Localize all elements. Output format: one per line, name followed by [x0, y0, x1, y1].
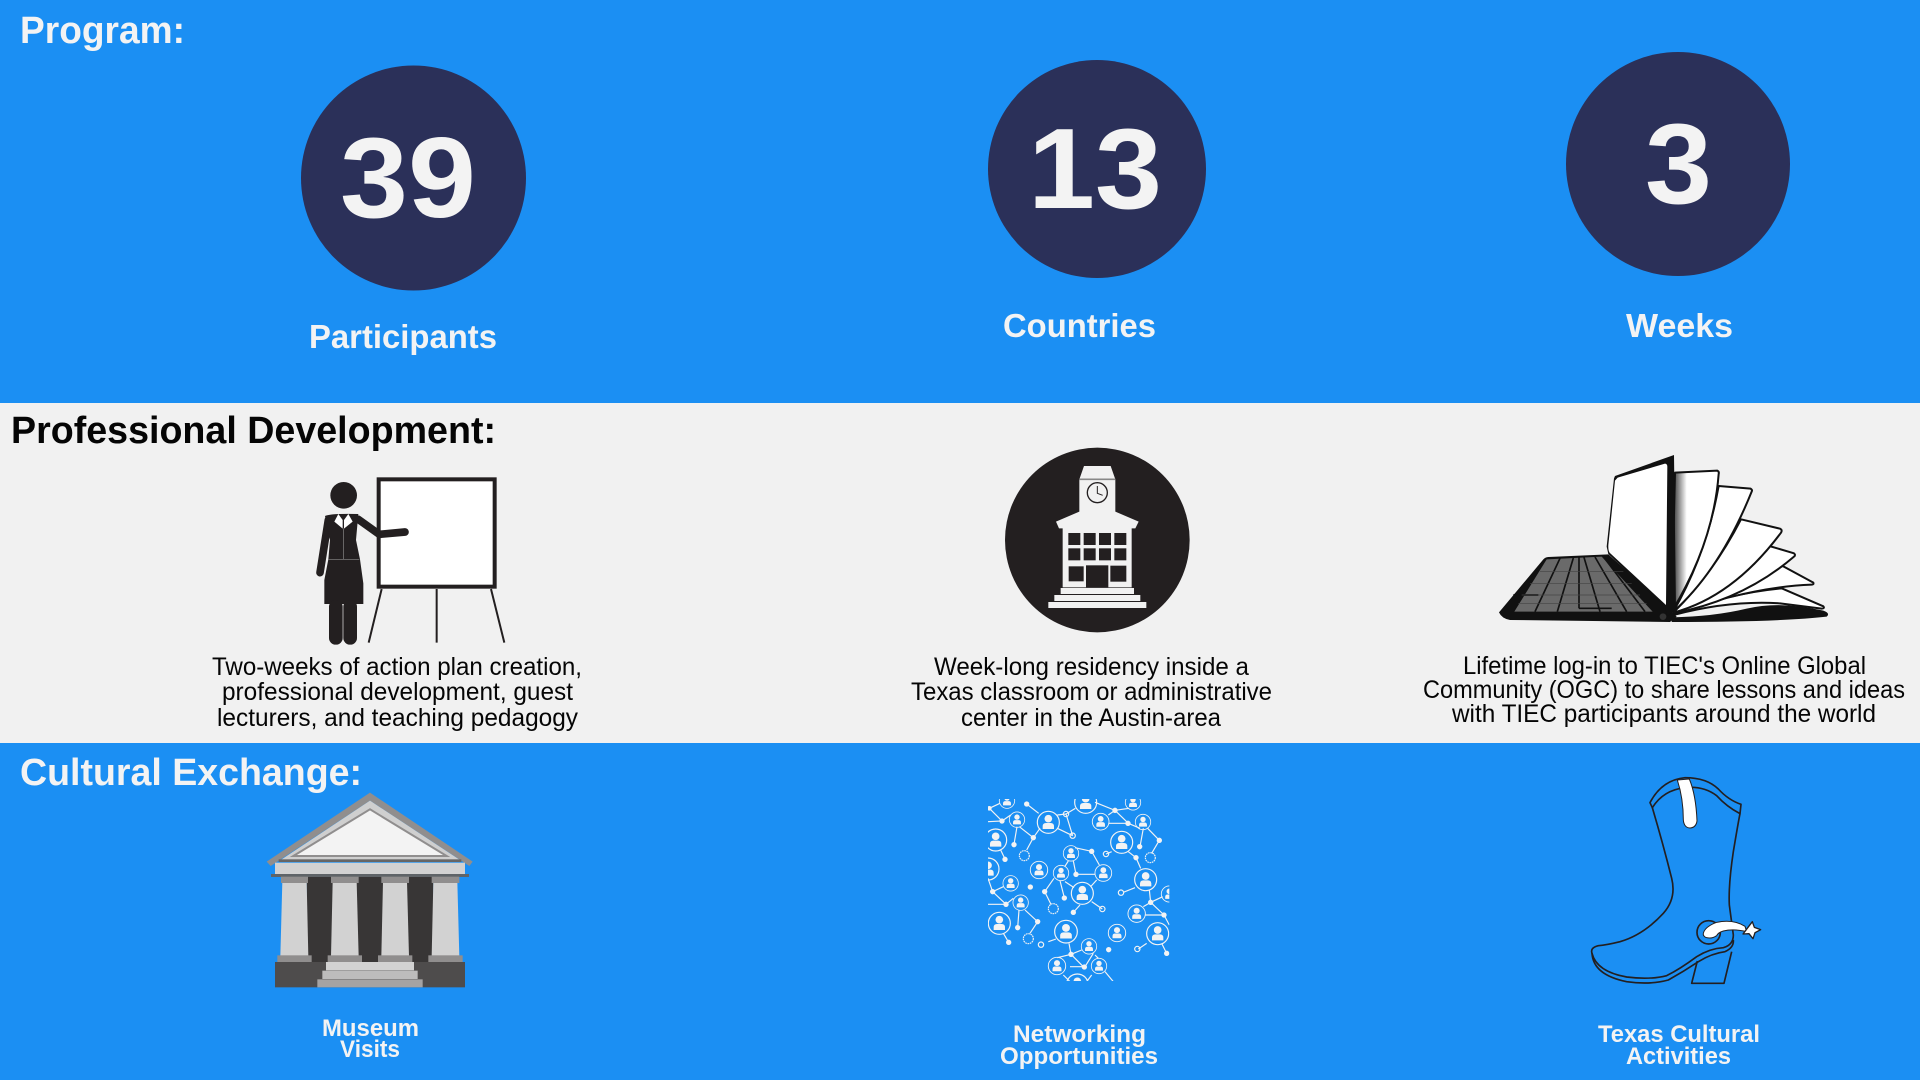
text: residency: Week-long residency inside a [934, 653, 1249, 681]
icon: school building [1005, 448, 1190, 632]
heading: Cultural Exchange: Cultural Exchange: [20, 752, 362, 794]
label: Texas cultural activities: Activities [1626, 1043, 1731, 1070]
label: museum visits: Visits [340, 1036, 400, 1063]
stat: 39 participants [301, 66, 526, 355]
icon: presenter at whiteboard [320, 479, 504, 645]
heading: Program: Program: [20, 10, 185, 52]
label: Texas cultural activities: Texas Cultural [1598, 1021, 1760, 1048]
icon: people network [988, 799, 1170, 981]
label: networking opportunities: Networking [1013, 1021, 1146, 1048]
stat: 39 participants: Participants [309, 318, 497, 355]
text: residency: Texas classroom or administrative [911, 678, 1272, 706]
stat: 39 participants: 39 [340, 115, 476, 242]
icon: cowboy boot with spur [1592, 778, 1761, 983]
panel: program background [0, 0, 1920, 403]
label: networking opportunities [1000, 1021, 1158, 1070]
label: museum visits: Museum [322, 1015, 419, 1042]
text: action plan: Two-weeks of action plan creation, [212, 653, 582, 681]
panel: cultural exchange background [0, 743, 1920, 1080]
stat: 3 weeks: Weeks [1626, 307, 1733, 344]
text: residency [911, 653, 1272, 732]
text: online global community: Community (OGC) to share lessons and ideas [1423, 676, 1905, 704]
text: online global community: with TIEC participants around the world [1451, 700, 1876, 728]
label: museum visits [322, 1015, 419, 1063]
stat: 3 weeks: 3 [1645, 101, 1712, 228]
icon: museum [267, 793, 473, 987]
stat: 13 countries: 13 [1028, 106, 1162, 233]
text: action plan: lecturers, and teaching pedagogy [217, 704, 578, 732]
stat: 3 weeks [1566, 52, 1790, 344]
text: residency: center in the Austin-area [961, 704, 1221, 732]
heading: Professional Development: Professional Development: [11, 410, 496, 452]
stat: 13 countries [988, 60, 1206, 344]
label: Texas cultural activities [1598, 1021, 1760, 1070]
text: action plan: professional development, guest [222, 678, 573, 706]
text: online global community: Lifetime log-in to TIEC's Online Global [1463, 652, 1866, 680]
text: action plan [212, 653, 582, 732]
icon: laptop turning into book [1499, 455, 1828, 622]
text: online global community [1423, 652, 1905, 728]
panel: professional development background [0, 403, 1920, 743]
label: networking opportunities: Opportunities [1000, 1043, 1158, 1070]
stat: 13 countries: Countries [1003, 307, 1156, 344]
